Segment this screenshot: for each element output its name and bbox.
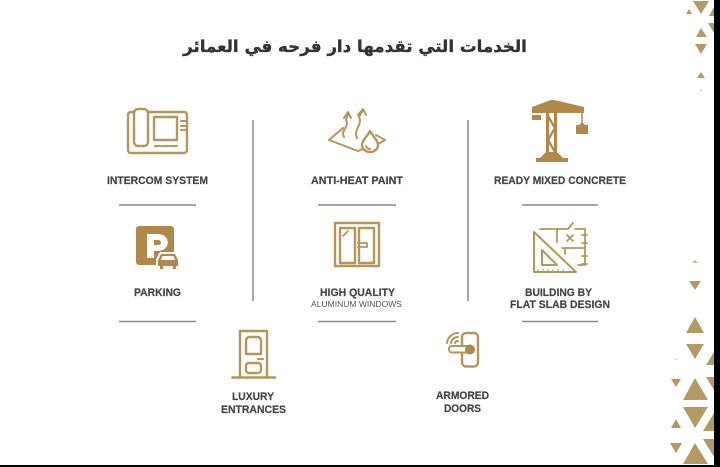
title: الخدمات التي تقدمها دار فرحه في العمائر bbox=[182, 36, 527, 57]
label: armored doors bbox=[436, 390, 489, 415]
icon: anti-heat paint bbox=[329, 109, 385, 152]
label: high quality aluminum windows: HIGH QUALITY bbox=[320, 287, 396, 299]
label: high quality aluminum windows bbox=[311, 287, 402, 309]
label: intercom system: INTERCOM SYSTEM bbox=[107, 175, 208, 187]
icon: parking bbox=[136, 226, 178, 269]
label: anti-heat paint: ANTI-HEAT PAINT bbox=[311, 175, 403, 187]
icon: luxury door bbox=[232, 331, 275, 378]
label: building by flat slab design bbox=[510, 287, 610, 311]
label: armored doors: DOORS bbox=[444, 403, 481, 415]
label: ready mixed concrete: READY MIXED CONCRETE bbox=[494, 175, 626, 187]
label: high quality aluminum windows: ALUMINUM WINDOWS bbox=[311, 300, 402, 309]
label: luxury entrances: LUXURY bbox=[232, 391, 275, 403]
label: building by flat slab design: BUILDING BY bbox=[525, 287, 593, 299]
decorative triangles: top right bbox=[686, 1, 714, 91]
label: luxury entrances: ENTRANCES bbox=[221, 404, 286, 416]
decorative triangles: bottom right bbox=[670, 260, 714, 464]
icon: armored door lock bbox=[447, 333, 478, 366]
icon: intercom bbox=[128, 109, 187, 153]
label: luxury entrances bbox=[221, 391, 286, 416]
icon: flat slab blueprint bbox=[534, 223, 587, 272]
icon: tower crane bbox=[532, 100, 588, 162]
label: parking: PARKING bbox=[134, 287, 181, 299]
icon: aluminum window bbox=[335, 223, 379, 266]
label: building by flat slab design: FLAT SLAB DESIGN bbox=[510, 299, 610, 311]
label: armored doors: ARMORED bbox=[436, 390, 489, 402]
